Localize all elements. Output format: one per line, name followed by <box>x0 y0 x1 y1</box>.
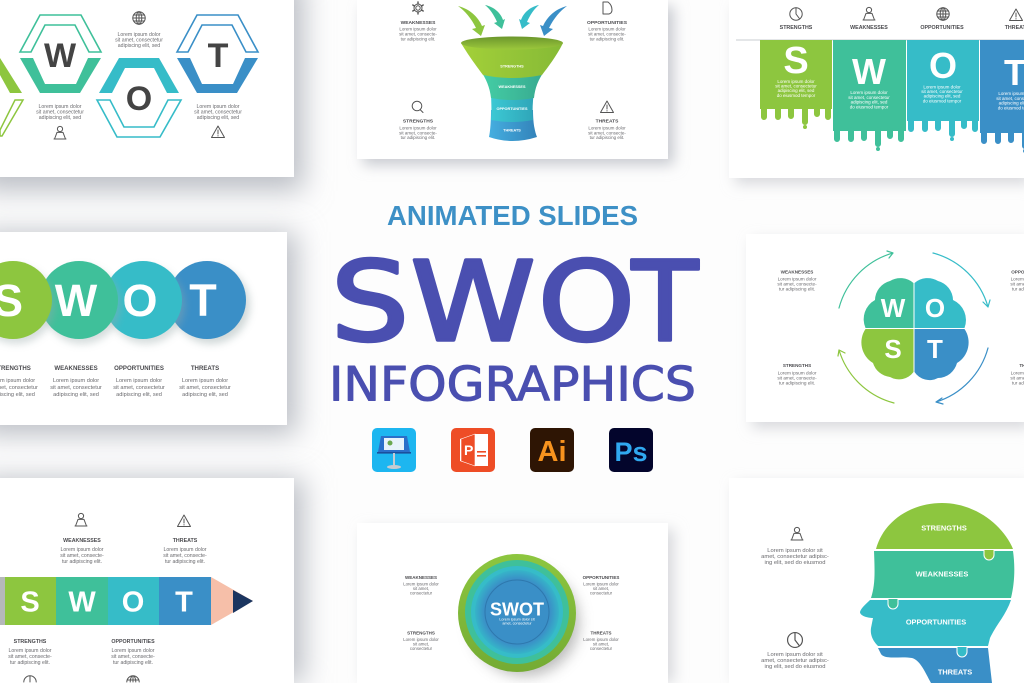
brain quadrants: O <box>925 293 945 323</box>
banner S: adipiscing elit, sed <box>778 88 815 93</box>
text: weaknesses <box>777 270 817 292</box>
text: strengths: Lorem ipsum dolor <box>9 648 52 654</box>
icon: warning <box>178 515 190 526</box>
text: threats: consectetur <box>590 646 613 651</box>
labels: THREATS <box>191 365 219 372</box>
icon: warning <box>600 101 614 112</box>
panel: funnel SWOT slide <box>357 0 674 165</box>
banner W: do eiusmod tempor <box>850 104 889 110</box>
text: weaknesses: Lorem ipsum dolor <box>778 276 817 282</box>
banner T <box>980 40 1024 153</box>
brain quadrants <box>861 278 969 380</box>
S hexagon remnant <box>0 58 23 136</box>
notes: sit amet, consectetur <box>50 385 102 391</box>
text: opportunities: tur adipiscing elit. <box>590 36 624 42</box>
text: weaknesses: Lorem ipsum dolor <box>403 582 439 586</box>
text: strengths <box>777 363 817 386</box>
banner W: adipiscing elit, sed <box>851 100 888 104</box>
banner S: Lorem ipsum dolor <box>777 79 815 84</box>
text: note two: ing elit, sed do eiusmod <box>765 664 825 670</box>
text: strengths: tur adipiscing elit. <box>779 380 815 386</box>
icon: person <box>75 513 87 526</box>
icon: Photoshop: Ps <box>614 437 648 467</box>
icon: clock, cut by the slide edge <box>24 676 36 682</box>
icon: magnifier <box>412 101 423 112</box>
icons row <box>790 7 1022 21</box>
panel: brain SWOT slide <box>746 234 1024 428</box>
funnel: WEAKNESSES <box>498 85 526 89</box>
banner O <box>907 40 979 141</box>
text: weaknesses: sit amet, consecte- <box>777 282 817 286</box>
icon: Photoshop <box>609 428 653 472</box>
text: opportunities <box>587 20 628 42</box>
notes: adipiscing elit, sed <box>116 392 162 398</box>
text: opportunities: consectetur <box>590 590 613 596</box>
text: weaknesses: WEAKNESSES <box>781 270 813 274</box>
panel: concentric circles SWOT slide <box>357 523 674 683</box>
text: strengths: STRENGTHS <box>14 639 47 645</box>
text: weaknesses note: adipiscing elit, sed <box>39 115 81 121</box>
text: weaknesses: sit amet, consecte- <box>399 32 437 36</box>
text: threats: tur adipiscing elit. <box>590 135 624 140</box>
text: threats note: adipiscing elit, sed <box>197 115 239 121</box>
icon: PowerPoint: P <box>464 442 473 458</box>
notes: adipiscing elit, sed <box>182 392 228 398</box>
head puzzle: STRENGTHS <box>921 524 967 532</box>
brain quadrants: S <box>884 334 902 364</box>
banner O: sit amet, consectetur <box>921 89 963 94</box>
banner O: adipiscing elit, sed <box>924 94 961 98</box>
banner O: Lorem ipsum dolor <box>923 84 961 90</box>
banner labels: WEAKNESSES <box>850 25 888 31</box>
text: weaknesses: tur adipiscing elit. <box>779 286 815 292</box>
panel: circles SWOT slide <box>0 232 297 435</box>
labels: WEAKNESSES <box>54 365 98 372</box>
circle T: T <box>189 275 217 326</box>
subtitle: ANIMATED SLIDES <box>387 200 638 231</box>
title: SWOT: S <box>331 238 409 366</box>
concentric circles: amet, consectetur <box>502 622 532 626</box>
text: note one: amet, consectetur adipisc- <box>761 554 829 560</box>
text: opportunities: Lorem ipsum dolor <box>112 648 155 654</box>
head puzzle: OPPORTUNITIES <box>906 618 966 626</box>
text: strengths: STRENGTHS <box>407 630 435 636</box>
icon: Illustrator: Ai <box>538 436 566 468</box>
W hexagon <box>20 15 101 93</box>
funnel: THREATS <box>503 128 521 132</box>
panel: hexagon SWOT slide <box>0 0 304 191</box>
text: weaknesses: WEAKNESSES <box>405 575 437 580</box>
text: strengths <box>403 630 439 651</box>
brain quadrants: T <box>927 334 943 364</box>
text: weaknesses <box>60 538 104 565</box>
concentric circles <box>458 554 579 676</box>
text: opportunities: sit amet, <box>593 586 609 591</box>
T hexagon <box>177 15 258 93</box>
text: opportunities: OPPORTUNITIES <box>111 639 155 645</box>
text: weaknesses: sit amet, <box>413 586 429 591</box>
icon: person <box>791 527 803 540</box>
text: strengths: tur adipiscing elit. <box>401 135 435 140</box>
head puzzle: THREATS <box>938 668 972 676</box>
title: SWOT: T <box>631 238 699 366</box>
text: threats <box>583 630 619 651</box>
notes: Lorem ipsum dolor <box>53 378 99 384</box>
text: opportunities: Lorem ipsum dolor <box>588 26 626 32</box>
text: opportunities note: Lorem ipsum dolor <box>118 32 161 38</box>
text: opportunities note: adipiscing elit, sed <box>118 43 160 49</box>
panel: head SWOT slide <box>729 478 1024 683</box>
W hexagon: W <box>44 37 77 75</box>
banner W: sit amet, consectetur <box>848 95 890 100</box>
arrows into funnel <box>458 5 567 36</box>
text: note two: amet, consectetur adipisc- <box>761 658 829 664</box>
head puzzle <box>860 503 1014 683</box>
banner labels: STRENGTHS <box>780 25 813 31</box>
banner S: S <box>783 40 809 82</box>
funnel: OPPORTUNITIES <box>496 107 528 111</box>
concentric circles: Lorem ipsum dolor sit <box>499 618 535 622</box>
text: weaknesses: WEAKNESSES <box>401 20 436 26</box>
notes: Lorem ipsum dolor <box>116 378 162 384</box>
text: weaknesses: Lorem ipsum dolor <box>61 547 104 553</box>
text: opportunities: Lorem ipsum dolor <box>583 582 619 586</box>
circle W: W <box>55 275 98 326</box>
text: weaknesses: sit amet, consecte- <box>60 553 104 559</box>
text: strengths: sit amet, consecte- <box>8 654 52 660</box>
circle T <box>168 261 250 344</box>
text: note one: ing elit, sed do eiusmod <box>765 560 825 566</box>
text: weaknesses <box>403 575 439 596</box>
banner O: do eiusmod tempor <box>923 98 962 104</box>
icon: warning <box>212 126 224 138</box>
concentric circles: SWOT <box>490 600 544 620</box>
T hexagon: T <box>208 37 229 75</box>
pencil: S <box>20 586 40 618</box>
banner W: Lorem ipsum dolor <box>850 90 888 95</box>
head puzzle: WEAKNESSES <box>916 570 968 578</box>
text: strengths: Lorem ipsum dolor <box>778 370 817 376</box>
banner S <box>760 40 832 129</box>
text: opportunities: sit amet, consecte- <box>111 654 155 660</box>
circle O: O <box>122 275 158 326</box>
banner S: sit amet, consectetur <box>775 84 817 88</box>
title: SWOT: O <box>538 238 635 366</box>
title: INFOGRAPHICS: INFOGRAPHICS <box>329 358 696 412</box>
text: weaknesses: consectetur <box>410 590 433 596</box>
text: weaknesses: tur adipiscing elit. <box>62 559 102 565</box>
pencil <box>0 577 253 625</box>
banner W: W <box>852 51 886 92</box>
icon: PowerPoint <box>451 428 495 472</box>
text: strengths: STRENGTHS <box>403 118 434 124</box>
O hexagon <box>97 58 181 137</box>
title: SWOT <box>331 238 699 366</box>
text: opportunities: sit amet, consecte- <box>588 32 626 36</box>
text: opportunities: OPPORTUNITIES <box>587 20 628 26</box>
banner labels: OPPORTUNITIES <box>920 25 964 31</box>
panel: dripping banners slide <box>729 0 1024 184</box>
text: strengths: sit amet, <box>413 642 429 646</box>
text: strengths: Lorem ipsum dolor <box>399 126 437 130</box>
circle W <box>40 261 121 344</box>
text: weaknesses note: Lorem ipsum dolor <box>39 104 82 110</box>
text: strengths: tur adipiscing elit. <box>10 660 50 666</box>
icon: globe <box>133 12 145 24</box>
text: threats <box>1010 363 1024 386</box>
notes: Lorem ipsum dolor <box>182 378 228 384</box>
banner W <box>833 40 906 151</box>
text: strengths: STRENGTHS <box>783 363 811 368</box>
icon: bell <box>603 2 612 14</box>
text: threats: sit amet, consecte- <box>163 553 207 559</box>
text: opportunities: OPPORTUNITIES <box>583 575 619 580</box>
brain quadrants: W <box>881 293 906 323</box>
pencil: W <box>68 586 96 618</box>
text: strengths: Lorem ipsum dolor <box>403 637 439 642</box>
text: opportunities: tur adipiscing elit. <box>113 660 153 666</box>
text: opportunities <box>1010 270 1024 292</box>
text: threats <box>163 538 207 565</box>
text: weaknesses: WEAKNESSES <box>63 538 101 544</box>
text: weaknesses note: sit amet, consectetur <box>36 110 84 116</box>
text: strengths <box>8 639 52 666</box>
text: threats: Lorem ipsum dolor <box>588 126 626 130</box>
text: strengths: sit amet, consecte- <box>777 376 817 380</box>
text: threats: Lorem ipsum dolor <box>583 637 619 642</box>
text: threats note: Lorem ipsum dolor <box>197 104 240 110</box>
text: opportunities <box>583 575 619 596</box>
text: opportunities <box>111 639 155 666</box>
text: weaknesses <box>399 20 437 42</box>
text: threats <box>588 118 626 140</box>
text: weaknesses: Lorem ipsum dolor <box>399 26 437 32</box>
icon: Illustrator <box>530 428 574 472</box>
text: threats: Lorem ipsum dolor <box>164 547 207 553</box>
text: threats: THREATS <box>591 630 611 636</box>
notes: sit amet, consectetur <box>179 385 231 391</box>
text: threats: sit amet, <box>593 642 609 646</box>
O hexagon: O <box>126 80 152 118</box>
text: opportunities note: sit amet, consectetur <box>115 38 163 44</box>
funnel <box>461 36 563 141</box>
cycle arrows <box>838 251 990 404</box>
labels: OPPORTUNITIES <box>114 365 164 372</box>
text: threats note: sit amet, consectetur <box>194 110 242 116</box>
icon: person <box>54 126 66 139</box>
icon: clock <box>788 633 802 647</box>
text: threats: tur adipiscing elit. <box>165 559 205 565</box>
text: weaknesses: tur adipiscing elit. <box>401 36 435 42</box>
text: strengths: sit amet, consecte- <box>399 130 437 136</box>
text: threats: THREATS <box>173 538 198 544</box>
circle O <box>104 261 185 344</box>
panel: pencil SWOT slide <box>0 478 304 683</box>
banner O: O <box>929 45 957 86</box>
notes: adipiscing elit, sed <box>53 392 99 398</box>
text: threats: THREATS <box>596 118 619 124</box>
icon: gear <box>413 2 423 14</box>
text: threats: sit amet, consecte- <box>588 130 626 136</box>
pencil: O <box>122 586 144 618</box>
icon: Keynote <box>372 428 416 472</box>
icon: globe, cut by the slide edge <box>127 676 139 682</box>
funnel: STRENGTHS <box>500 64 524 68</box>
pencil: T <box>175 586 193 618</box>
notes: sit amet, consectetur <box>113 385 165 391</box>
circle S <box>0 261 55 344</box>
banner S: do eiusmod tempor <box>777 93 816 98</box>
text: note two: Lorem ipsum dolor sit <box>767 652 823 658</box>
text: strengths <box>399 118 437 140</box>
text: strengths: consectetur <box>410 646 433 651</box>
text: note one: Lorem ipsum dolor sit <box>767 548 823 554</box>
title: SWOT: W <box>410 238 536 366</box>
